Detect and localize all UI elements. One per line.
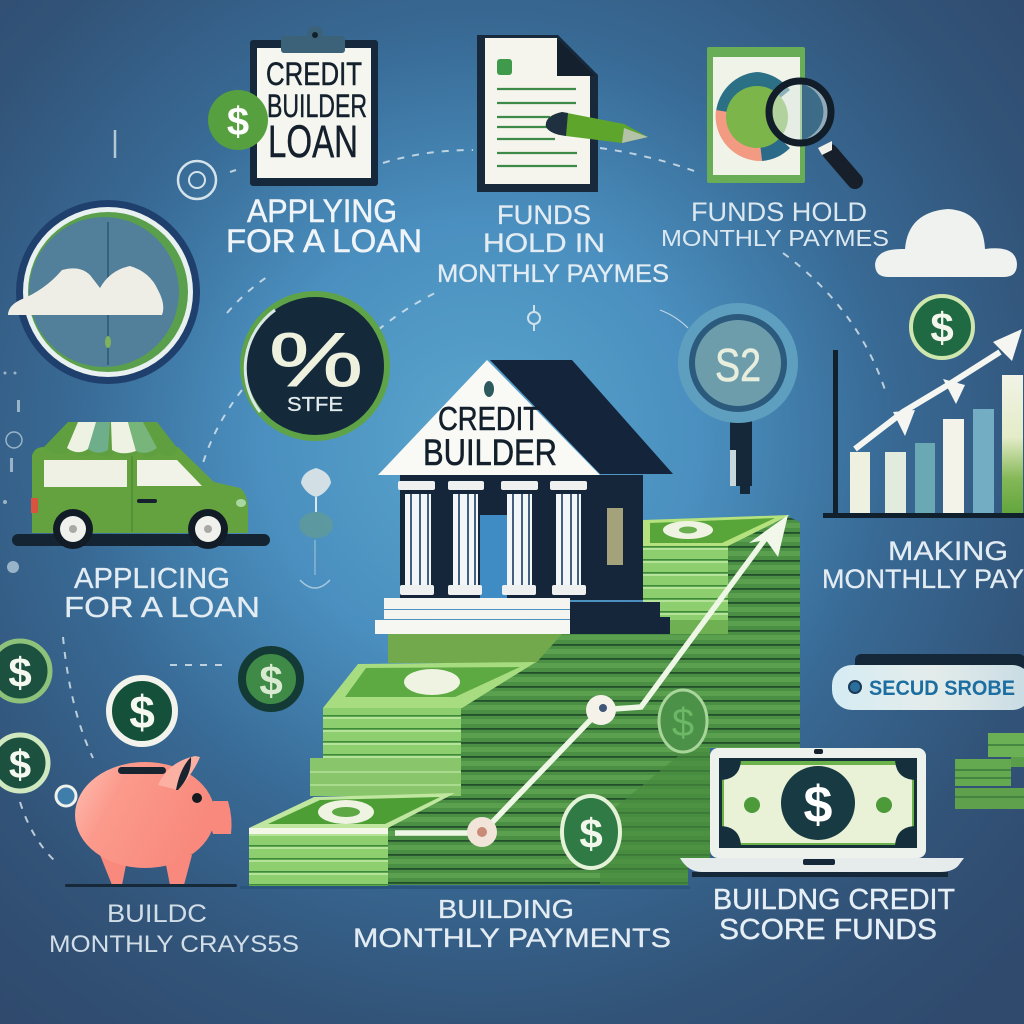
icon: report with magnifying glass <box>707 47 855 183</box>
heading: building credit score funds: SCORE FUNDS <box>719 914 937 946</box>
icon: dollar coin middle: $ <box>129 686 155 738</box>
icon: dollar coin left lower: $ <box>9 743 31 787</box>
icon: cloud top right <box>875 209 1017 277</box>
heading: build monthly crayss: BUILDC <box>107 900 207 928</box>
icon: dollar coin left upper: $ <box>8 649 32 696</box>
badge: secure score pill: SECUD SROBE <box>869 677 1015 700</box>
heading: funds hold monthly payments <box>661 197 889 251</box>
icon: credit builder loan clipboard: CREDIT <box>266 56 362 92</box>
icon: dollar coin dark: $ <box>259 657 283 704</box>
icon: small pin <box>528 305 540 331</box>
heading: applicing for a loan: FOR A LOAN <box>64 592 260 624</box>
badge: secure score pill <box>832 654 1024 710</box>
heading: funds hold in monthly payments <box>437 200 669 288</box>
heading: building monthly payments: MONTHLY PAYMENTS <box>353 923 671 953</box>
icon: particles at left <box>3 372 22 573</box>
heading: funds hold monthly payments: FUNDS HOLD <box>691 197 867 227</box>
badge: percent: % <box>269 318 363 403</box>
icon: dollar coin by clipboard <box>208 90 268 150</box>
bank building: CREDIT <box>438 400 540 437</box>
icon: laptop with banknote <box>680 748 964 877</box>
icon: dollar coin dark <box>242 650 300 708</box>
icon: piggy bank <box>56 756 237 887</box>
bar chart with arrow <box>823 329 1024 518</box>
icon: small cash stack right <box>955 733 1024 809</box>
icon: dollar coin middle <box>109 678 175 744</box>
icon: small ring <box>178 161 216 199</box>
icon: document with pen <box>477 35 648 192</box>
stack: dark main body <box>388 516 800 885</box>
icon: dollar on stack lower: $ <box>579 810 603 857</box>
icon: dollar coin by clipboard: $ <box>227 100 249 144</box>
icon: dollar coin left lower <box>0 735 48 791</box>
heading: applying for a loan top <box>226 193 422 259</box>
badge: percent: STFE <box>287 394 343 416</box>
icon: faint dollar on stack: $ <box>672 701 694 745</box>
pediment <box>378 360 600 475</box>
icon: dollar on stack lower <box>562 796 620 868</box>
stack: lower front <box>249 793 455 886</box>
heading: applying for a loan top: FOR A LOAN <box>226 223 422 259</box>
baseline <box>240 886 690 889</box>
heading: applying for a loan top: APPLYING <box>247 193 397 229</box>
heading: building monthly payments: BUILDING <box>438 894 574 924</box>
roof back <box>490 360 673 474</box>
icon: cloud in circle <box>8 200 200 384</box>
icon: dollar coin right: $ <box>930 304 954 351</box>
heading: build monthly crayss <box>49 900 299 958</box>
heading: applicing for a loan <box>64 563 260 624</box>
heading: funds hold monthly payments: MONTHLY PAYMES <box>661 225 889 251</box>
heading: making monthly pay: MAKING <box>888 536 1008 566</box>
heading: making monthly pay: MONTHLLY PAY <box>822 564 1024 594</box>
growth arrow <box>395 515 788 847</box>
stack: middle left <box>310 662 536 796</box>
heading: funds hold in monthly payments: MONTHLY PAYMES <box>437 260 669 288</box>
icon: dollar coin left upper <box>0 641 50 701</box>
icon: magnifier with S2: S2 <box>715 339 761 391</box>
building body <box>400 475 643 600</box>
awning <box>44 422 178 457</box>
icon: magnifier with S2 <box>678 303 798 494</box>
stack: olive band under steps <box>388 634 562 663</box>
columns <box>398 481 587 595</box>
heading: funds hold in monthly payments: FUNDS <box>497 200 591 230</box>
heading: funds hold in monthly payments: HOLD IN <box>483 228 605 258</box>
icon: small tick <box>114 130 116 158</box>
icon: faint dollar on stack <box>659 690 707 752</box>
icon: pin shield <box>299 468 333 588</box>
icon: laptop with banknote: $ <box>804 776 833 834</box>
bank building <box>375 360 673 634</box>
icon: credit builder loan clipboard <box>250 26 378 186</box>
steps <box>384 598 570 609</box>
dashed connector arcs <box>20 148 887 863</box>
heading: building credit score funds: BUILDNG CREDIT <box>713 884 955 916</box>
heading: applicing for a loan: APPLICING <box>74 563 230 595</box>
heading: building credit score funds <box>713 884 955 946</box>
stack: top right <box>643 515 790 634</box>
icon: green van with awning <box>12 422 270 549</box>
bank building: BUILDER <box>423 432 557 473</box>
icon: dollar coin right <box>911 296 973 358</box>
badge: percent <box>243 294 387 438</box>
heading: build monthly crayss: MONTHLY CRAYS5S <box>49 931 299 958</box>
icon: credit builder loan clipboard: LOAN <box>268 116 358 167</box>
stepped cash stacks <box>249 515 800 886</box>
heading: making monthly pay <box>822 536 1024 594</box>
icon: credit builder loan clipboard: BUILDER <box>267 88 367 124</box>
heading: building monthly payments <box>353 894 671 953</box>
